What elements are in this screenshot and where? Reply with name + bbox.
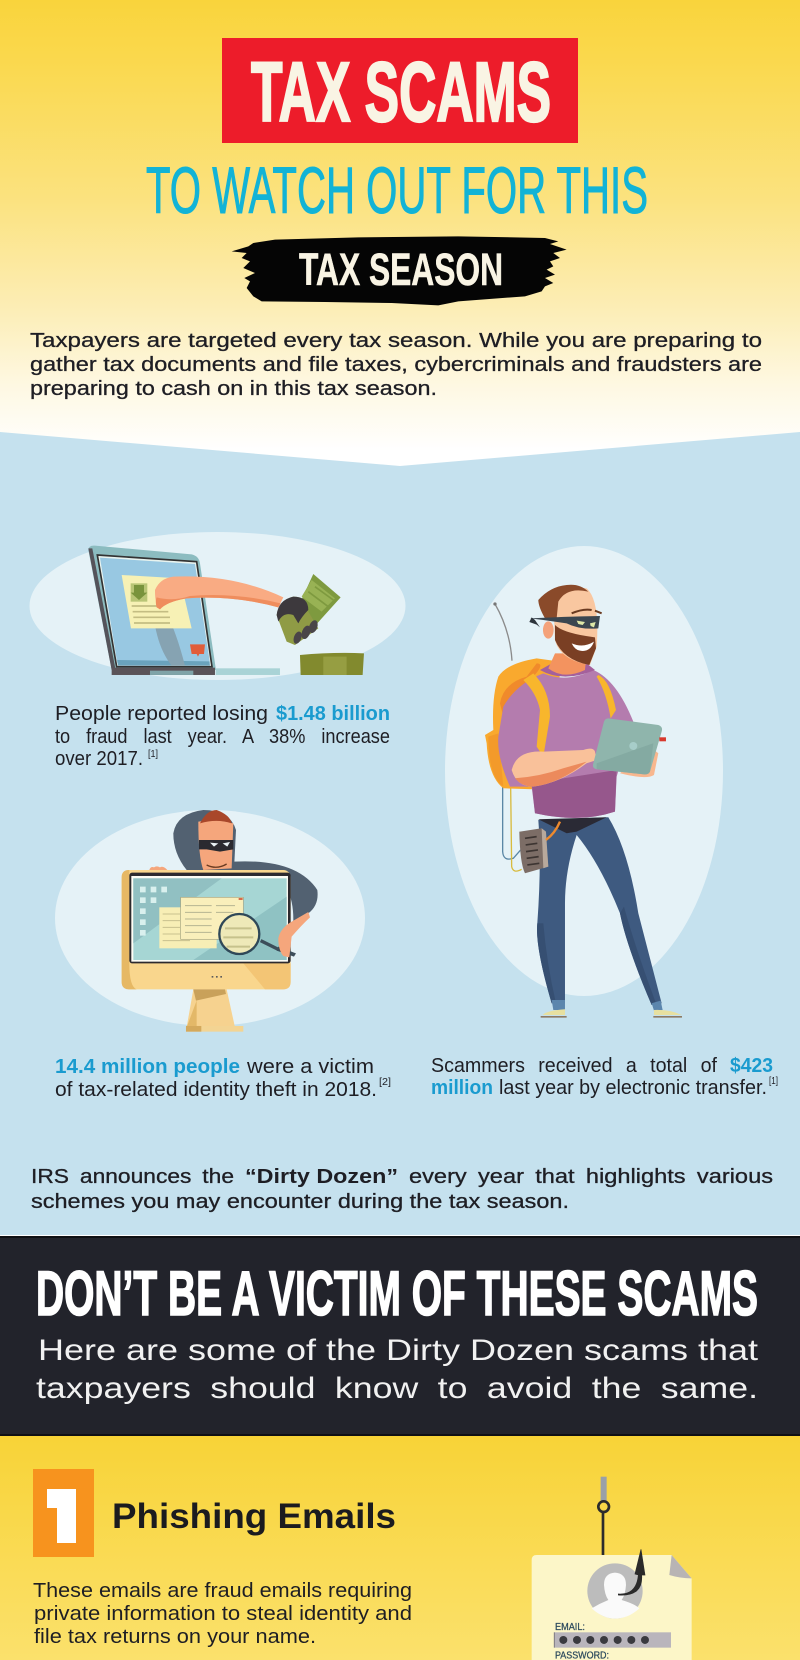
stat: electronic transfer: Scammers received a total of	[431, 1055, 717, 1077]
dirty dozen intro text: “Dirty Dozen”	[245, 1166, 398, 1188]
scam description	[33, 1580, 412, 1648]
scam heading: phishing emails: Phishing Emails	[112, 1497, 396, 1536]
stat: fraud losses	[55, 703, 390, 770]
scam description: These emails are fraud emails requiring	[33, 1580, 412, 1602]
stat: electronic transfer: million	[431, 1077, 493, 1099]
red banner: tax scams	[222, 38, 578, 143]
black brush banner: tax season: TAX SEASON	[299, 244, 503, 295]
stat: identity theft victims: of tax-related identity theft in 2018.	[55, 1079, 377, 1101]
black brush banner: tax season	[232, 236, 567, 305]
band subheading	[36, 1334, 759, 1405]
intro paragraph	[30, 330, 762, 400]
stat: identity theft victims: were a victim	[246, 1056, 374, 1078]
intro paragraph: preparing to cash on in this tax season.	[30, 378, 437, 400]
stat: fraud losses: [1]	[148, 749, 158, 760]
dirty dozen intro text: schemes you may encounter during the tax season.	[31, 1191, 569, 1213]
white separator and dark band	[0, 1235, 800, 1436]
stat: fraud losses: to fraud last year. A 38% increase	[55, 726, 390, 748]
scam description: private information to steal identity and	[34, 1603, 412, 1625]
illustration: hacker behind monitor	[55, 810, 365, 1032]
stat: identity theft victims: [2]	[379, 1077, 391, 1088]
stat: electronic transfer: [1]	[769, 1076, 778, 1087]
header background	[0, 0, 800, 470]
scam description: file tax returns on your name.	[34, 1626, 316, 1648]
dirty dozen intro text: IRS announces the	[31, 1166, 234, 1188]
stat: electronic transfer: $423	[730, 1055, 773, 1077]
stat: identity theft victims: 14.4 million people	[55, 1056, 240, 1078]
stat: electronic transfer: last year by electronic transfer.	[499, 1077, 767, 1099]
scam section background	[0, 1436, 800, 1660]
band subheading: taxpayers should know to avoid the same.	[36, 1372, 758, 1405]
band subheading: Here are some of the Dirty Dozen scams that	[38, 1334, 759, 1367]
stat: fraud losses: $1.48 billion	[276, 703, 390, 725]
dirty dozen intro text: every year that highlights various	[409, 1166, 773, 1188]
dirty dozen intro text	[31, 1166, 773, 1213]
red banner: tax scams: TAX SCAMS	[251, 45, 551, 139]
icon: fishing hook on login form	[532, 1477, 692, 1660]
blue panel	[0, 432, 800, 1235]
icon: fishing hook on login form: EMAIL:	[555, 1622, 585, 1633]
intro paragraph: gather tax documents and file taxes, cybercriminals and fraudsters are	[30, 354, 762, 376]
title	[146, 38, 648, 305]
illustration: arm reaching out of laptop	[30, 532, 406, 680]
illustration: masked man with backpack and tablet	[445, 546, 723, 1018]
stat: identity theft victims	[55, 1056, 391, 1101]
number badge 1: 1	[40, 1471, 84, 1560]
stat: fraud losses: People reported losing	[55, 703, 268, 725]
stat: fraud losses: over 2017.	[55, 748, 143, 770]
intro paragraph: Taxpayers are targeted every tax season. While you are preparing to	[30, 330, 762, 352]
stat: electronic transfer	[431, 1055, 778, 1099]
